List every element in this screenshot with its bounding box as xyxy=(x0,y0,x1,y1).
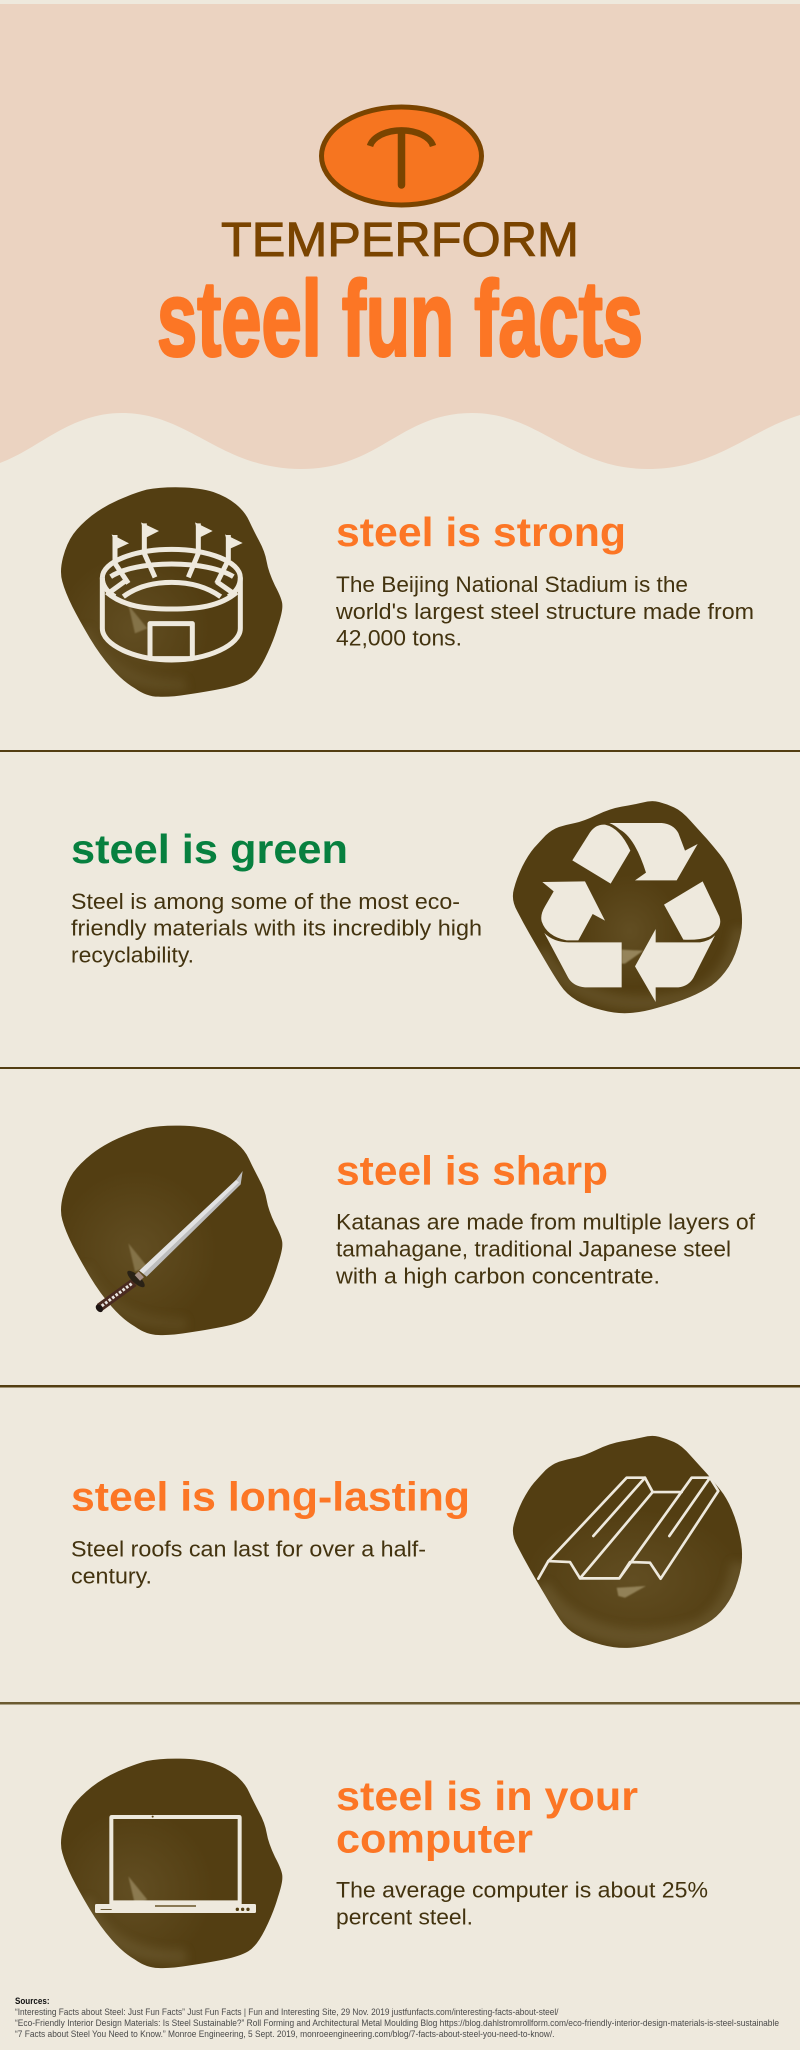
body text: with a high carbon concentrate. xyxy=(335,1264,660,1288)
heading: steel is in your xyxy=(336,1773,638,1819)
logo: Temperform xyxy=(221,107,579,267)
body text xyxy=(335,1210,756,1288)
body text: Steel roofs can last for over a half- xyxy=(71,1536,426,1562)
body text: The Beijing National Stadium is the xyxy=(336,572,688,597)
icon: corrugated roof xyxy=(538,1478,718,1579)
sources: “Interesting Facts about Steel: Just Fun Facts” Just Fun Facts | Fun and Interesting Site, 29 Nov. 2019 justfunfacts.com/interesting-facts-about-steel/ xyxy=(15,2007,559,2018)
panel: steel is long-lasting xyxy=(71,1436,743,1649)
logo emblem xyxy=(322,107,482,205)
icon: recycling arrows xyxy=(541,823,720,1002)
body text: Steel is among some of the most eco- xyxy=(71,889,460,914)
panel: steel is in your computer xyxy=(53,1759,708,1970)
body text xyxy=(71,1536,426,1588)
body text: tamahagane, traditional Japanese steel xyxy=(336,1236,731,1262)
blob with katana icon xyxy=(57,1126,282,1335)
body text xyxy=(336,1878,708,1930)
heading: steel is strong xyxy=(336,509,626,555)
body text: friendly materials with its incredibly high xyxy=(71,916,482,941)
body text: The average computer is about 25% xyxy=(336,1878,708,1902)
blob with stadium icon xyxy=(57,487,282,702)
icon: laptop xyxy=(95,1815,256,1913)
panel: steel is sharp xyxy=(57,1126,756,1335)
icon: katana xyxy=(94,1171,243,1314)
body text: recyclability. xyxy=(71,942,194,968)
heading: steel is green xyxy=(71,826,348,872)
body text: percent steel. xyxy=(336,1904,473,1930)
blob with laptop icon xyxy=(53,1759,282,1970)
body text: Katanas are made from multiple layers of xyxy=(336,1210,756,1234)
heading: steel is sharp xyxy=(336,1148,608,1194)
body text: century. xyxy=(71,1564,152,1588)
panel: steel is strong xyxy=(57,487,754,702)
heading: computer xyxy=(336,1816,533,1862)
heading xyxy=(336,1773,638,1862)
logo wordmark: TEMPERFORM xyxy=(221,214,579,267)
header band with wavy edge xyxy=(0,4,800,469)
body text: 42,000 tons. xyxy=(336,626,462,650)
sources xyxy=(15,1996,779,2040)
panel: steel is green xyxy=(71,801,742,1013)
body text xyxy=(335,572,754,650)
sources: Sources: xyxy=(15,1996,50,2007)
sources: “7 Facts about Steel You Need to Know.” Monroe Engineering, 5 Sept. 2019, monroeengineering.com/blog/7-facts-about-steel-you-need-to-know/. xyxy=(15,2029,554,2040)
body text: world's largest steel structure made from xyxy=(335,599,754,624)
body text xyxy=(71,889,482,968)
blob with recycling icon xyxy=(513,801,742,1013)
heading: steel is long-lasting xyxy=(71,1474,470,1520)
icon: stadium xyxy=(102,522,243,660)
blob with roof icon xyxy=(513,1436,743,1649)
